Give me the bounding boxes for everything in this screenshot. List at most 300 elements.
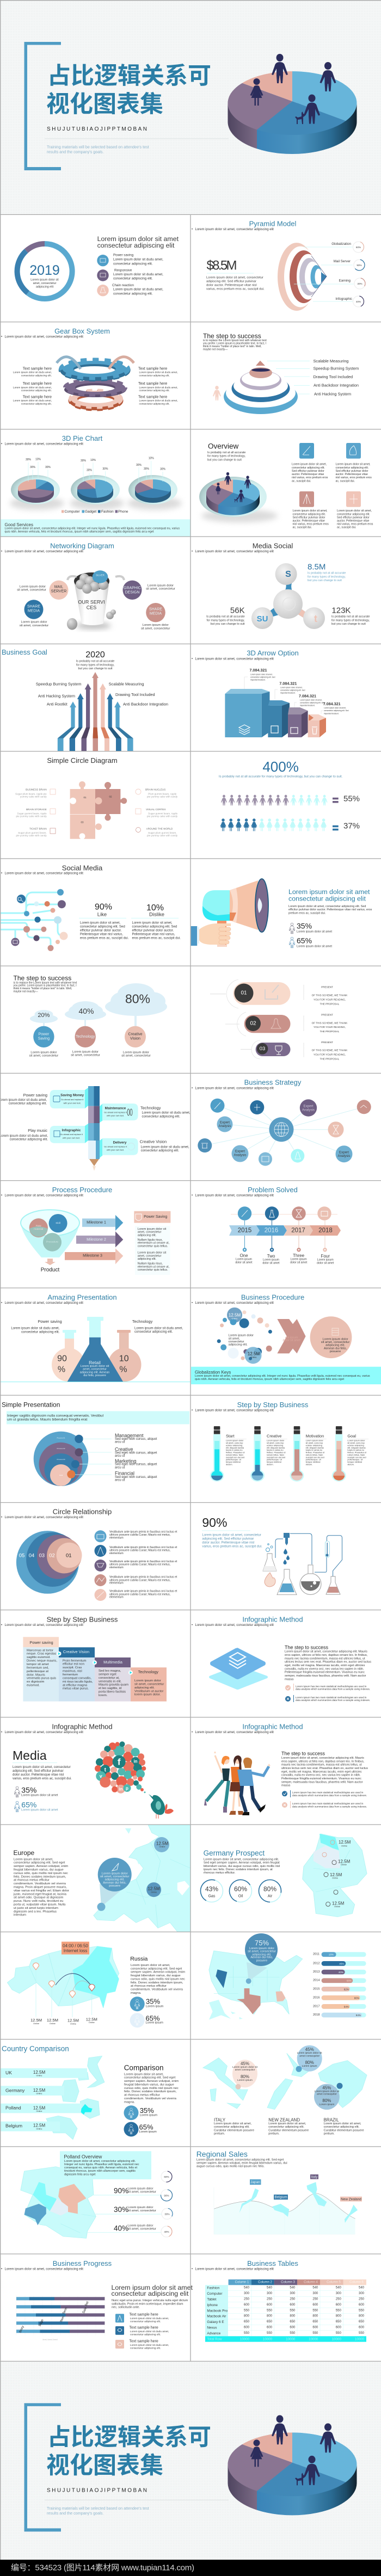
node captions: sit amet, consectetur: [141, 627, 170, 630]
percent labels: 30%: [45, 466, 51, 469]
bullet: Lorem ipsum dolor sit amet, consectetur adipiscing elit: [195, 550, 274, 553]
paragraph: porta ut, vulputate vitae ipsum. Nulla: [14, 1903, 66, 1907]
table body: 650: [312, 2320, 318, 2324]
title: Amazing Presentation: [47, 1293, 117, 1302]
bands: [1, 2068, 87, 2131]
bullet: Lorem ipsum dolor sit amet, consectetur adipiscing elit: [195, 657, 274, 661]
right notes: consectetur adipiscing elit.: [141, 1149, 179, 1153]
creative text: rutrum tellus. Nam: [267, 1453, 284, 1456]
stats: 35%: [21, 1785, 36, 1794]
description: Is probably not at all accurate: [207, 451, 245, 454]
tile text bottom: auctor. Pellentesque vitae: [293, 519, 325, 522]
panel: polland overview: 90%: [164, 2194, 169, 2197]
block labels: Lorem ipsum dolor sit amet,: [324, 707, 346, 709]
table body: 650: [336, 2320, 341, 2324]
panel: step to success trees: [13, 974, 167, 1058]
table total row: 10000: [240, 2337, 250, 2341]
brazil text: BRAZIL: [324, 2117, 339, 2122]
dislike stat: Dislike: [149, 911, 164, 917]
table body: 550: [312, 2309, 318, 2312]
brazil bubble: Lorem ipsum dolor sit: [314, 2090, 340, 2093]
timeline labels: Four: [321, 1254, 330, 1258]
milestone arrow 1: Milestone 1: [87, 1221, 106, 1224]
table body: 550: [244, 2309, 250, 2312]
location dot: [97, 1903, 106, 1911]
table body: 300: [359, 2292, 365, 2295]
goal text: finibus. Phasellus et: [347, 1451, 367, 1453]
column 1: euismod.: [27, 1684, 40, 1687]
table body: Advance: [207, 2331, 221, 2335]
bullet: Lorem ipsum dolor sit amet, consectetur adipiscing elit: [195, 2268, 274, 2271]
gauge rings: [196, 1876, 281, 1906]
check row: [285, 1684, 370, 1691]
paragraph: dolor auctor. Pellentesque vitae nisl: [13, 1773, 64, 1777]
equals signs: [333, 798, 339, 803]
year labels: 2012: [313, 1962, 319, 1965]
cover note: results and the company's goals.: [47, 149, 103, 154]
captions: sit amet, consectetur: [71, 1054, 100, 1057]
dislike text: efficitur pulvinar dolor auctor.: [132, 929, 174, 932]
dislike text: consectetur adipiscing elit. Sed: [132, 925, 177, 928]
bullet: Lorem ipsum dolor sit amet, consectetur adipiscing elit: [4, 1624, 83, 1627]
right arrow labels: Scalable Measuring: [109, 681, 144, 686]
band stats: 12.5M: [33, 2105, 45, 2110]
legend: Computer: [64, 509, 80, 514]
column 3: porta libero facilisis: [99, 1691, 126, 1694]
stat circles: [124, 2105, 138, 2136]
heading: Lorem ipsum dolor sit amet: [288, 888, 370, 896]
route arcs: [56, 1974, 90, 1985]
nested ellipses: [34, 1432, 88, 1486]
description: think it means "holder of place text" in latin. Well,: [203, 345, 262, 348]
column 2: fermentum: [63, 1673, 78, 1677]
stacked bar chart: Item: [60, 2315, 65, 2323]
retail text: Retail: [89, 1360, 101, 1365]
labels: Sed eget nibh cursus, aliquet: [115, 1476, 157, 1479]
band text: Integer sagittis dignissim nulla consequat venenatis. Vestibul: [7, 1414, 104, 1418]
paragraph: rhoncus metus efficitur.: [204, 1871, 236, 1875]
paragraph: magna.: [124, 2100, 135, 2104]
notes panel: consectetur quis tellus.: [138, 1268, 168, 1272]
bullet: •: [192, 1731, 193, 1734]
map callout: posuere: [256, 1959, 267, 1963]
connectors: [294, 247, 354, 301]
labels: Drawing Tool Included: [314, 374, 353, 379]
paragraph: condimentum. Vestibulum vel viverra: [131, 1988, 183, 1992]
nested ellipses: Process 01: [57, 1437, 65, 1439]
title: Infographic Method: [242, 1723, 303, 1730]
brazil bubble: amet consequitor: [317, 2092, 337, 2096]
timeline chevrons: 2017: [291, 1228, 305, 1234]
panel: simple presentation: [2, 1401, 189, 1486]
tile text bottom: consectetur adipiscing elit.: [337, 513, 370, 516]
block labels: imperdiet tincidunt.: [324, 712, 339, 714]
list text: ultrices posuere cubilia Curae; Mauris est metus,: [109, 1533, 170, 1537]
table body: 800: [312, 2315, 318, 2318]
new zealand bubble: [296, 2045, 322, 2072]
bullet: Lorem ipsum dolor sit amet, consectetur adipiscing elit: [4, 1302, 83, 1305]
table body: 550: [359, 2309, 365, 2312]
bullet: •: [1, 443, 2, 446]
left captions: Text sample here: [23, 367, 52, 371]
title: Circle Relationship: [53, 1507, 112, 1516]
list text: elementum: [109, 1536, 124, 1539]
node captions: Lorem ipsum dolor: [143, 624, 169, 627]
cover note: Training materials will be selected based on attendee's test: [47, 144, 149, 149]
milestone arrow 2: [76, 1231, 123, 1247]
table total row: 10000: [263, 2337, 273, 2341]
panel: pyramid model: 30%: [357, 282, 362, 285]
pill 01: 01: [241, 990, 247, 996]
creative text: suscipit non dui sed: [267, 1456, 285, 1458]
stat rows: sit amet, consectetur: [127, 2209, 156, 2213]
puzzle pieces: 01: [83, 796, 87, 799]
block labels: 7.084.321: [323, 701, 341, 706]
table body: 600: [336, 2326, 341, 2330]
list text: elementum: [109, 1596, 124, 1599]
heading: Germany Prospect: [204, 1849, 265, 1857]
overview box: Polland Overview: [64, 2154, 102, 2159]
stat rows: Lorem ipsum dolor: [127, 2224, 153, 2228]
map callout: Lorem ipsum dolor: [249, 1947, 274, 1950]
paragraph: felis. Donec sodales interdum ipsum,: [124, 2090, 177, 2093]
lab illustration: [263, 1533, 342, 1595]
stat rows: 90%: [114, 2186, 128, 2195]
node captions: Lorem ipsum dolor: [148, 584, 174, 587]
paragraph: Pellentesque fringilla euismod elementum. Vivamus eu nunc: [281, 1777, 361, 1780]
italy bubble: [232, 2060, 258, 2090]
labels: Earning: [339, 279, 351, 282]
maps: [203, 2053, 367, 2110]
table body: 800: [244, 2315, 250, 2318]
motivation text: Lorem ipsum dolor: [306, 1439, 324, 1441]
table header: [229, 2279, 366, 2285]
goal text: elit. Aliquam lacinia: [347, 1446, 366, 1449]
progress bars: 62%: [344, 1988, 349, 1990]
right captions: Text sample here: [138, 367, 167, 371]
paragraph: Lorem ipsum dolor sit amet, consectetur adipiscing elit. Mauris: [281, 1757, 364, 1760]
big peach circle: Aenean dui felis,: [324, 1347, 347, 1350]
timeline chevrons: 2015: [238, 1228, 251, 1234]
dislike stat: 10%: [146, 903, 164, 912]
table body: 250: [359, 2297, 365, 2301]
paragraph: Lorem ipsum dolor sit amet, consectetur adipiscing elit. Mauris: [285, 1650, 367, 1654]
pill notes: YOU FOR YOUR READING,: [314, 998, 346, 1001]
table body: 600: [244, 2303, 250, 2307]
percent labels: 10%: [35, 458, 41, 461]
map labels: Online: [334, 1906, 340, 1908]
panel: 3D pie chart: [1, 434, 190, 537]
paragraph: eget, mollis vel magna. Maecenas iaculis, enim eget ultricies: [281, 1770, 362, 1773]
table header: Column 5: [327, 2281, 341, 2284]
goal text: turpis in varius eu: [347, 1449, 364, 1451]
table body: 600: [290, 2326, 296, 2330]
panel: polland overview: 60%: [164, 2176, 169, 2178]
stats: Lorem ipsum dolor sit amet: [21, 1809, 58, 1812]
like text: eros pretium eros ac, suscipit dui.: [80, 936, 129, 940]
labels: Sed eget nibh cursus, aliquet: [115, 1463, 157, 1466]
cover 3D pie with people: [228, 54, 357, 154]
thermometer 3: [290, 1426, 304, 1482]
paragraph: magna.: [131, 1992, 142, 1995]
block labels: Lorem ipsum dolor sit amet,: [300, 699, 322, 701]
retail text: adipiscing elit. Aenean: [80, 1371, 109, 1374]
motivation text: sit amet, cons ecp: [306, 1441, 323, 1444]
panel: polland overview: 40%: [164, 2230, 169, 2233]
like text: Pellentesque vitae nisl varius,: [80, 933, 123, 936]
band stats: Online: [36, 2092, 42, 2094]
column 4: lorem ipsum dolor.: [134, 1693, 161, 1697]
legend: Gadget: [85, 509, 96, 514]
list text: elementum: [109, 1552, 124, 1555]
band stats: Online: [36, 2110, 42, 2112]
right notes: Technology: [140, 1105, 161, 1110]
column 3: Multimedia: [103, 1660, 122, 1665]
stat 123K: Is probably not at all accurate: [331, 615, 370, 619]
icon text: Text sample here: [130, 2313, 158, 2316]
poland map: [21, 2167, 96, 2238]
right captions: consectetur adipiscing elit.: [139, 389, 170, 392]
dislike text: eros pretium eros ac, suscipit dui.: [132, 936, 181, 940]
labels: arcu ut: [115, 1479, 125, 1482]
paragraph: Lorem ipsum dolor sit amet, consectetur adipiscing elit.: [204, 1858, 279, 1862]
list text: Vestibulum ante ipsum primis in faucibus orci luctus et: [109, 1546, 177, 1549]
column 1: Maecenas at tortor: [27, 1649, 53, 1652]
paragraph: Lorem ipsum dolor sit amet, consectetur adipiscing elit. Sed eget: [196, 2158, 284, 2161]
column 1: Donec neque mauris,: [27, 1660, 57, 1663]
column 4: Vestibulum ut auctor: [134, 1690, 163, 1693]
bullet: Lorem ipsum dolor sit amet, consectetur adipiscing elit: [195, 1624, 274, 1627]
title: Problem Solved: [248, 1186, 298, 1194]
paragraph: justo, euismod eget feugiat at, lacinia: [13, 1893, 67, 1896]
band labels: Polland: [5, 2105, 21, 2110]
brazil bubble: Lorem ipsum: [319, 2103, 334, 2106]
flasks: [1, 1317, 190, 1382]
progress bars: 64%: [344, 2005, 349, 2008]
timeline labels: Lorem ipsum: [291, 1258, 307, 1261]
panel: three friends: [192, 1723, 368, 1815]
notes panel: consectetur quis tellus.: [138, 1244, 168, 1248]
internet loss label: [62, 1942, 89, 1955]
left puzzle notes: yummy cake with candy: [20, 795, 47, 798]
paragraph: vitae varius est fringilla vel. Etiam dolor: [14, 1889, 69, 1893]
icon text: consectetur adipiscing elit.: [130, 2320, 161, 2323]
main bubble: Aenean dui felis,: [103, 1881, 127, 1884]
column 2: efficitur est non: [63, 1663, 84, 1666]
motivation text: rutrum tellus. Nam: [306, 1453, 323, 1456]
heading: Russia: [130, 1956, 148, 1962]
country labels: New Zealand: [341, 2197, 361, 2201]
bullet: •: [192, 1194, 193, 1198]
tile text bottom: ac, suscipit dui.: [337, 526, 356, 529]
internet loss label: Internet loss: [64, 1948, 87, 1953]
motivation text: suscipit non dui sed: [306, 1456, 324, 1458]
stat 56K: for many types of technology,: [207, 619, 245, 622]
stat text: Lorem ipsum: [140, 2113, 157, 2117]
icon text: Lorem ipsum dolor sit dudu amet,: [130, 2317, 169, 2320]
male pictogram row: [221, 795, 328, 805]
callout text: quis nibh. Aenean vehicula, felis et tincidunt rhoncus, ipsum nibh ullamcorper sem, sagittis dignissim felis arcu eget: [195, 1378, 345, 1381]
panel: simple circle diagram: [15, 756, 178, 839]
left notes: Play music: [28, 1127, 47, 1133]
block labels: consectetur adipiscing elit. Sed: [300, 702, 325, 704]
stat 123K: but you can change to suit: [331, 623, 366, 626]
overview box: Lorem ipsum dolor sit amet, consectetur adipiscing elit.: [64, 2160, 136, 2163]
pill notes: YOU FOR YOUR READING,: [314, 1025, 346, 1028]
right arrow labels: Drawing Tool Included: [115, 692, 155, 697]
bullet: Lorem ipsum dolor sit amet, consectetur adipiscing elit: [195, 1087, 274, 1090]
progress bars: [322, 1952, 366, 2017]
notes panel: amet, consectetur: [138, 1254, 162, 1258]
column 2: maximus, nisl: [63, 1670, 82, 1673]
goal text: Goal: [347, 1433, 356, 1438]
node: graphic design: [123, 581, 142, 600]
callout text: with your own text.: [63, 1101, 81, 1104]
captions: Lorem ipsum dolor: [123, 1051, 149, 1054]
table header: Column 2: [258, 2281, 272, 2284]
bullet: Lorem ipsum dolor sit amet, consectetur adipiscing elit: [195, 1731, 274, 1734]
list text: ultrices posuere cubilia Curae; Mauris est metus,: [109, 1563, 170, 1567]
stat bubble north: [154, 1837, 169, 1852]
labels: arcu ut: [115, 1441, 125, 1444]
bullet: Lorem ipsum dolor sit amet, consectetur adipiscing elit: [4, 2268, 83, 2271]
bubbles: 12.5M: [248, 1351, 260, 1356]
callout text: Go ahead and replace it: [61, 1098, 84, 1100]
block labels: 7.084.321: [299, 693, 316, 698]
tile text top: Lorem ipsum dolor sit amet,: [292, 463, 327, 466]
block labels: 7.084.321: [279, 681, 297, 686]
panel: networking diagram: [1, 542, 175, 630]
stat rows: Lorem ipsum dolor: [127, 2206, 153, 2209]
pie 1: [10, 475, 64, 510]
start text: tempor eleifend: [226, 1460, 241, 1463]
retail text: dui felis, posuere: [83, 1374, 106, 1377]
paragraph: felis. Donec sodales interdum ipsum,: [14, 1875, 66, 1878]
big peach circle: Lorem ipsum dolor: [322, 1338, 348, 1341]
tile text top: consectetur adipiscing elit.: [292, 466, 325, 470]
paragraph: ultrices lectus sem nec erat. Phasellus diam ex, auctor sed luctus: [285, 1661, 371, 1664]
band labels: Germany: [5, 2088, 25, 2093]
paragraph: semper, malesuada risus faucibus, pharetra velit. Nam auctor: [281, 1780, 363, 1784]
title: Step by Step Business: [237, 1401, 309, 1409]
creative text: pellentesque. Ut: [267, 1458, 282, 1460]
stacked bar chart: Term: [62, 2307, 69, 2315]
left notes: consectetur adipiscing elit.: [9, 1102, 47, 1106]
item text: Lorem ipsum dolor sit dudu amet,: [113, 272, 163, 276]
milestone circles: [238, 1206, 331, 1221]
left captions: consectetur adipiscing elit.: [21, 374, 52, 377]
notes panel: amet, consectetur: [138, 1231, 162, 1234]
big peach circle: sit amet, consectetur: [321, 1341, 349, 1344]
table body: 300: [290, 2292, 296, 2295]
paragraph: varius, eros pretium eros ac, suscipit dui.: [13, 1777, 72, 1780]
pill notes: THE PROPOSAL: [320, 1030, 340, 1033]
italy text: Curabitur elementum posuere: [214, 2129, 254, 2132]
column 4: Lorem ipsum dolor: [134, 1679, 161, 1683]
bullet: •: [1, 335, 2, 338]
new zealand bubble: amet consequitor: [299, 2054, 320, 2057]
stat 56K: Is probably not at all accurate: [206, 615, 245, 619]
country shapes on curve: [239, 2182, 358, 2223]
column 1: neque. Cras egestas: [27, 1653, 56, 1656]
icon text: Lorem ipsum dolor sit dudu amet,: [130, 2330, 169, 2333]
nested ellipses: Goal: [59, 1474, 63, 1476]
timeline labels: Three: [293, 1253, 305, 1258]
bullet: •: [1, 1731, 2, 1734]
bubbles: [217, 1308, 272, 1364]
stat text: 35%: [146, 1997, 160, 2005]
column 4: adipiscing elit.: [134, 1686, 155, 1690]
bullet: •: [192, 1409, 193, 1413]
milestone arrow 2: Milestone 2: [87, 1238, 106, 1242]
map callout: sit amet, consectetur: [248, 1950, 276, 1953]
panel: polland overview: [21, 2151, 174, 2238]
pie in bowl: [199, 472, 278, 522]
tile text top: consectetur adipiscing elit.: [335, 466, 368, 470]
callout text: with your own text.: [63, 1136, 80, 1139]
map markers: [322, 1840, 338, 1906]
node: share media rose: [146, 603, 165, 622]
bullet: •: [192, 1624, 193, 1627]
right captions: Lorem ipsum dolor sit dudu amet,: [139, 386, 178, 389]
node: graphic design: DESIGN: [125, 590, 139, 594]
paragraph: augue cursus odio, quis mollis nisl ipsum nec felis.: [196, 2165, 265, 2168]
right notes: Creative Vision: [140, 1139, 167, 1144]
right notes: Lorem ipsum dolor sit dudu amet,: [141, 1145, 189, 1149]
column 3: [95, 1657, 131, 1702]
heading: Media: [13, 1748, 47, 1762]
pill notes: YOU FOR YOUR READING,: [314, 1053, 346, 1056]
map labels: 12.5M: [339, 1839, 351, 1845]
table body: 550: [267, 2309, 273, 2312]
timeline labels: Two: [267, 1254, 275, 1258]
panel: gear box system: [1, 327, 178, 410]
callout icons: [53, 1096, 135, 1150]
legend: Phone: [118, 509, 128, 514]
creative text: sit amet, cons ecp: [267, 1441, 284, 1444]
trees: [30, 983, 167, 1027]
footer bar: [0, 2560, 381, 2576]
creative text: tempor eleifend: [267, 1460, 281, 1463]
overview box: [60, 2151, 151, 2179]
start text: elit. Aliquam lacinia: [226, 1446, 244, 1449]
gauge labels: Gas: [208, 1894, 216, 1898]
pin labels: 12.5M: [47, 2018, 58, 2022]
bullet: Lorem ipsum dolor sit amet, consectetur adipiscing elit: [195, 228, 274, 231]
table body: 800: [336, 2315, 341, 2318]
node: share media blue: [24, 600, 44, 619]
cross row: data analysis which summarizes data from a sample using indexes.: [296, 1699, 370, 1701]
curved arrows: [67, 576, 124, 580]
paragraph: cursus odio, quis mollis nisl ipsum nec: [124, 2087, 179, 2090]
icon text: consectetur adipiscing elit.: [130, 2333, 161, 2336]
node: graphic design: GRAPHIC: [124, 586, 141, 590]
band stats: Online: [36, 2075, 42, 2077]
list text: elementum: [109, 1582, 124, 1585]
panel: business procedure: [191, 1293, 381, 1384]
motivation text: turpis in varius eu: [306, 1449, 322, 1451]
closing bracket: [24, 2403, 61, 2531]
progress bars: 80%: [354, 1996, 359, 1999]
labels: Sed eget nibh cursus, aliquet: [115, 1438, 157, 1441]
table body: 550: [290, 2309, 296, 2312]
paragraph: dolor auctor. Pellentesque vitae nisl: [206, 284, 257, 287]
column 3: venenatis in elit.: [99, 1680, 122, 1683]
heading: consectetur adipiscing elit: [288, 895, 366, 903]
labels: Mail Server: [334, 259, 351, 263]
italy text: pretium.: [214, 2132, 225, 2135]
description: Is probably not at all accurate for many types of technology, but you can change to suit.: [219, 775, 343, 779]
